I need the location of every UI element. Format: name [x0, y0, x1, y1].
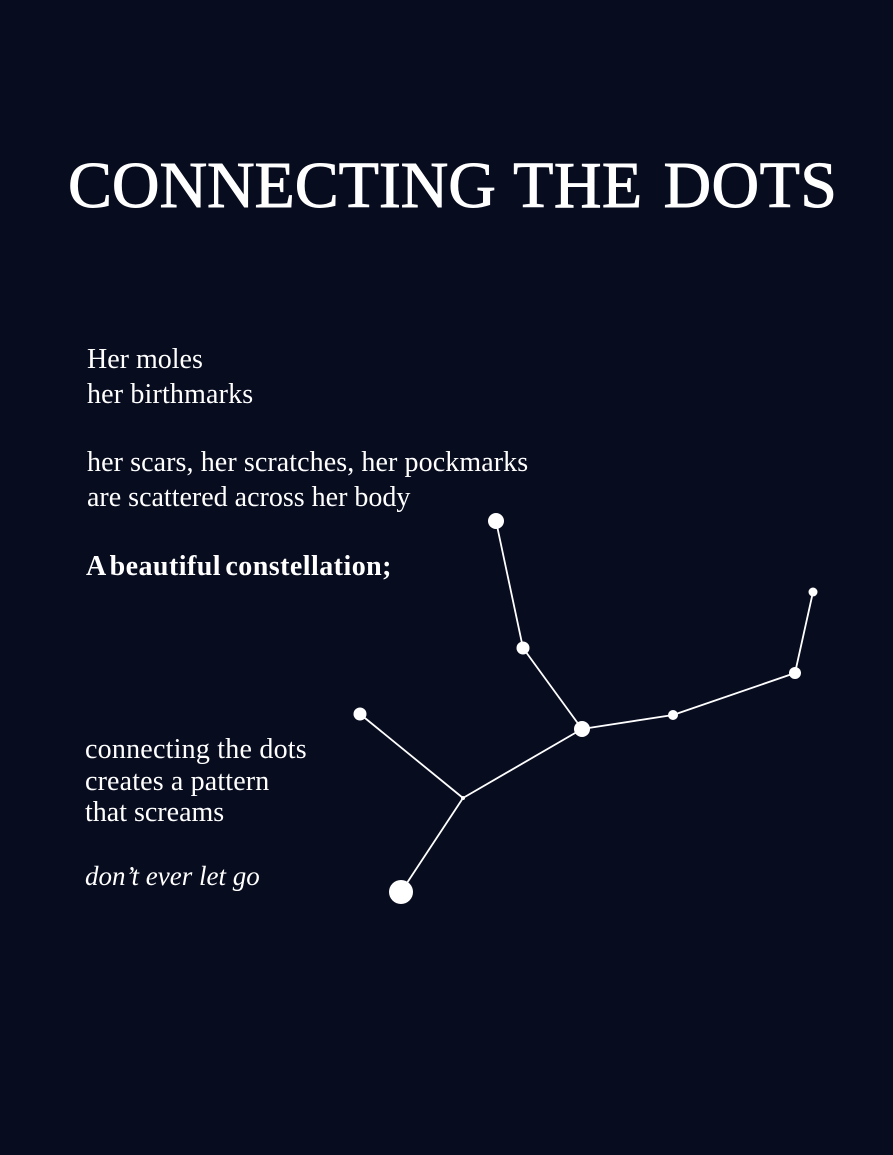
text: that screams: that screams [85, 797, 224, 828]
text: her birthmarks: her birthmarks [87, 379, 253, 410]
text: don't ever let go: don’t ever let go [85, 861, 260, 891]
text: her moles: Her moles [87, 344, 203, 375]
text: her scars: her scars, her scratches, her pockmarks [87, 447, 528, 478]
text: connecting the dots: connecting the dots [85, 734, 307, 765]
title: CONNECTING THE DOTS [68, 149, 837, 222]
text: a beautiful constellation: A beautiful constellation; [86, 551, 392, 582]
text: scattered across her body: are scattered across her body [87, 482, 410, 513]
text: creates a pattern: creates a pattern [85, 766, 269, 797]
